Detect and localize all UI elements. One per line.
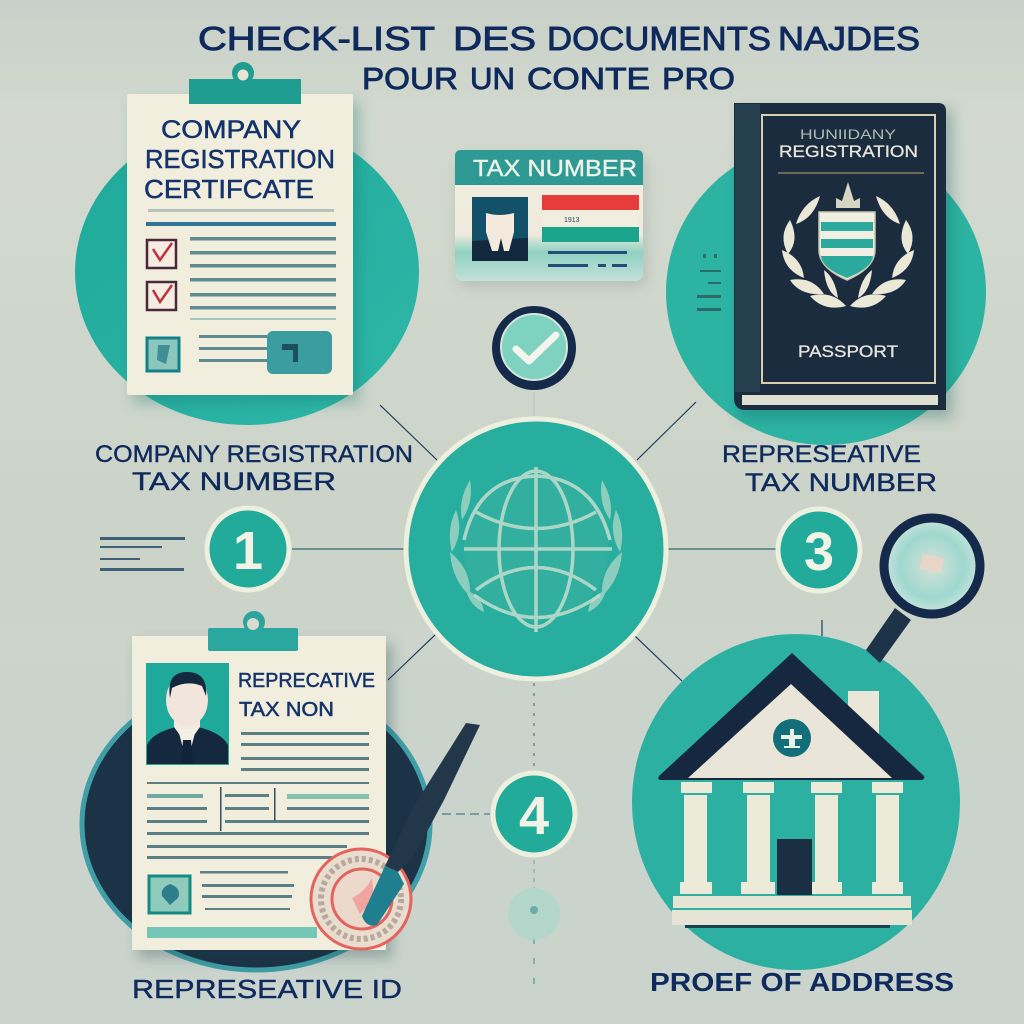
document sheet	[127, 94, 353, 395]
columns	[680, 782, 903, 894]
document heading: REGISTRATION	[145, 144, 335, 174]
label: representative id: REPRESEATIVE ID	[132, 974, 402, 1004]
passport heading: REGISTRATION	[779, 142, 918, 161]
pen	[362, 723, 480, 926]
panel: representative id	[82, 611, 480, 970]
laurel wreath	[782, 196, 914, 308]
roof	[658, 653, 924, 780]
clipboard clip	[189, 62, 301, 104]
icon: magnifying glass	[866, 518, 980, 663]
id heading	[238, 670, 375, 721]
label: representative tax number	[722, 441, 937, 497]
label: proof of address: PROEF OF ADDRESS	[650, 967, 954, 997]
passport heading	[779, 126, 918, 161]
document heading: CERTIFCATE	[144, 174, 314, 204]
backdrop circle: id	[82, 678, 430, 970]
panel: proof of address	[632, 634, 960, 970]
clipboard clip	[208, 611, 298, 651]
panel: tax number card	[455, 150, 646, 286]
title: PRO	[662, 61, 735, 96]
faint badge	[508, 888, 560, 940]
label: company registration tax number: COMPANY REGISTRATION	[95, 441, 413, 468]
number badge 1	[207, 508, 289, 590]
central globe	[406, 419, 666, 679]
passport heading: HUNIIDANY	[800, 126, 897, 142]
title: DES	[453, 20, 536, 57]
hungarian flag: 1913	[564, 217, 580, 224]
red check boxes	[147, 240, 176, 310]
title: NAJDES	[778, 20, 920, 57]
chimney	[848, 691, 879, 741]
hungarian flag	[542, 195, 639, 242]
number badge 1: 1	[233, 521, 263, 581]
id heading: TAX NON	[239, 699, 334, 721]
emblem	[773, 719, 811, 757]
portrait	[146, 663, 229, 765]
passport cover	[734, 103, 946, 410]
number badge 4: 4	[519, 786, 549, 846]
label: representative tax number: TAX NUMBER	[745, 469, 937, 497]
red stamp	[311, 849, 411, 949]
title: POUR	[362, 61, 458, 96]
passport label: PASSPORT	[798, 342, 898, 361]
number badge 3: 3	[804, 522, 834, 582]
id heading: REPRECATIVE	[238, 670, 375, 692]
id text lines	[147, 732, 369, 910]
side micro text	[100, 537, 185, 571]
small emblem	[147, 338, 179, 371]
title	[198, 20, 920, 96]
card title: TAX NUMBER	[473, 155, 637, 181]
door	[777, 839, 812, 895]
title: DOCUMENTS	[547, 20, 771, 57]
card micro text	[548, 251, 627, 267]
icon: building	[658, 653, 924, 928]
number badge 3	[778, 509, 860, 591]
backdrop circle: certificate	[75, 119, 419, 425]
label: company registration tax number: TAX NUMBER	[132, 468, 336, 496]
blurred seal block	[267, 331, 332, 374]
laurel branches	[450, 480, 622, 612]
backdrop circle: passport	[666, 139, 986, 445]
icon: globe	[464, 467, 612, 632]
title: UN	[470, 61, 515, 96]
label: representative tax number: REPRESEATIVE	[722, 441, 921, 468]
coat of arms	[782, 182, 914, 308]
pediment	[688, 684, 892, 778]
connector lines	[292, 392, 822, 986]
document heading: COMPANY	[161, 116, 301, 144]
document heading	[144, 116, 335, 204]
title: CONTE	[527, 61, 650, 96]
portrait	[472, 197, 528, 261]
label: company registration tax number	[95, 441, 413, 496]
faint side marks	[697, 254, 721, 311]
panel: company registration certificate	[75, 62, 419, 425]
teal footer bar	[147, 927, 317, 938]
steps	[672, 896, 912, 928]
panel: passport	[666, 103, 986, 445]
card header	[455, 150, 643, 185]
document text lines	[146, 209, 336, 362]
number badge 4	[493, 773, 575, 855]
icon: check badge	[492, 306, 576, 390]
backdrop circle: address	[632, 634, 960, 970]
id emblem	[149, 876, 190, 913]
id sheet	[132, 636, 386, 950]
title: CHECK-LIST	[198, 20, 435, 57]
